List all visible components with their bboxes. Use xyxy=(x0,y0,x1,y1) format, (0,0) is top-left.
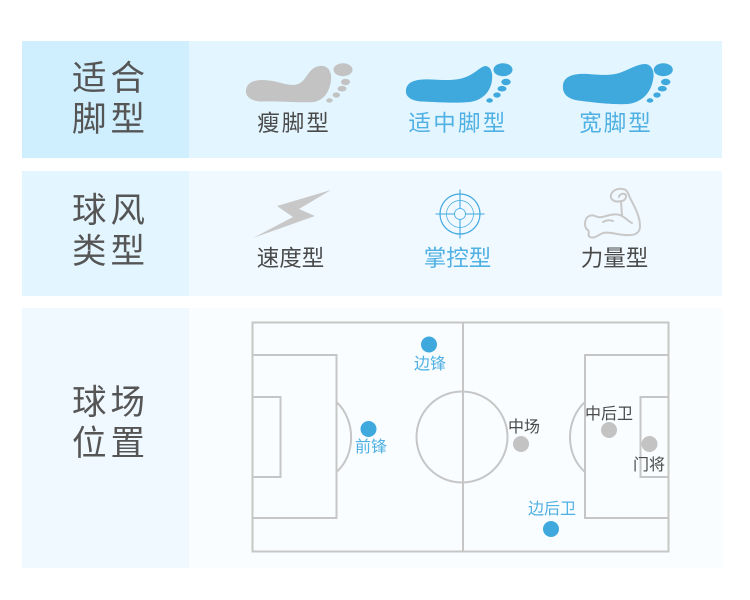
panel: foot type xyxy=(22,41,722,158)
label: full back: 边后卫 xyxy=(528,501,576,518)
heading: field position: 位置 xyxy=(72,425,149,463)
heading: field position: 球场 xyxy=(72,384,149,422)
label: medium foot: 适中脚型 xyxy=(408,111,508,136)
label: centre back: 中后卫 xyxy=(585,406,633,423)
panel: field position xyxy=(22,308,722,568)
panel: play style xyxy=(22,171,722,296)
icon: wide foot xyxy=(562,63,673,104)
marker: goalkeeper xyxy=(642,436,658,452)
label: winger: 边锋 xyxy=(414,356,446,373)
marker: midfielder xyxy=(513,436,529,452)
label: wide foot: 宽脚型 xyxy=(579,111,653,136)
label: slim foot: 瘦脚型 xyxy=(257,111,331,136)
heading: play style: 球风 xyxy=(72,192,149,230)
icon: target xyxy=(436,190,484,238)
marker: centre back xyxy=(601,422,617,438)
heading: foot type: 脚型 xyxy=(72,101,149,139)
heading: foot type xyxy=(22,41,189,158)
label: forward: 前锋 xyxy=(355,439,387,456)
label: power type: 力量型 xyxy=(581,246,648,271)
label: control type: 掌控型 xyxy=(424,246,491,271)
label: goalkeeper: 门将 xyxy=(633,457,665,474)
heading: play style: 类型 xyxy=(72,233,149,271)
icon: medium foot xyxy=(406,63,512,103)
heading: field position xyxy=(22,308,189,568)
label: speed type: 速度型 xyxy=(257,246,324,271)
icon: lightning xyxy=(254,190,330,238)
marker: winger xyxy=(421,336,437,352)
icon: muscle arm xyxy=(584,188,641,238)
label: midfielder: 中场 xyxy=(508,419,540,436)
heading: play style xyxy=(22,171,189,296)
marker: forward xyxy=(360,421,376,437)
marker: full back xyxy=(543,521,559,537)
heading: foot type: 适合 xyxy=(72,60,149,98)
icon: slim foot xyxy=(246,63,352,103)
